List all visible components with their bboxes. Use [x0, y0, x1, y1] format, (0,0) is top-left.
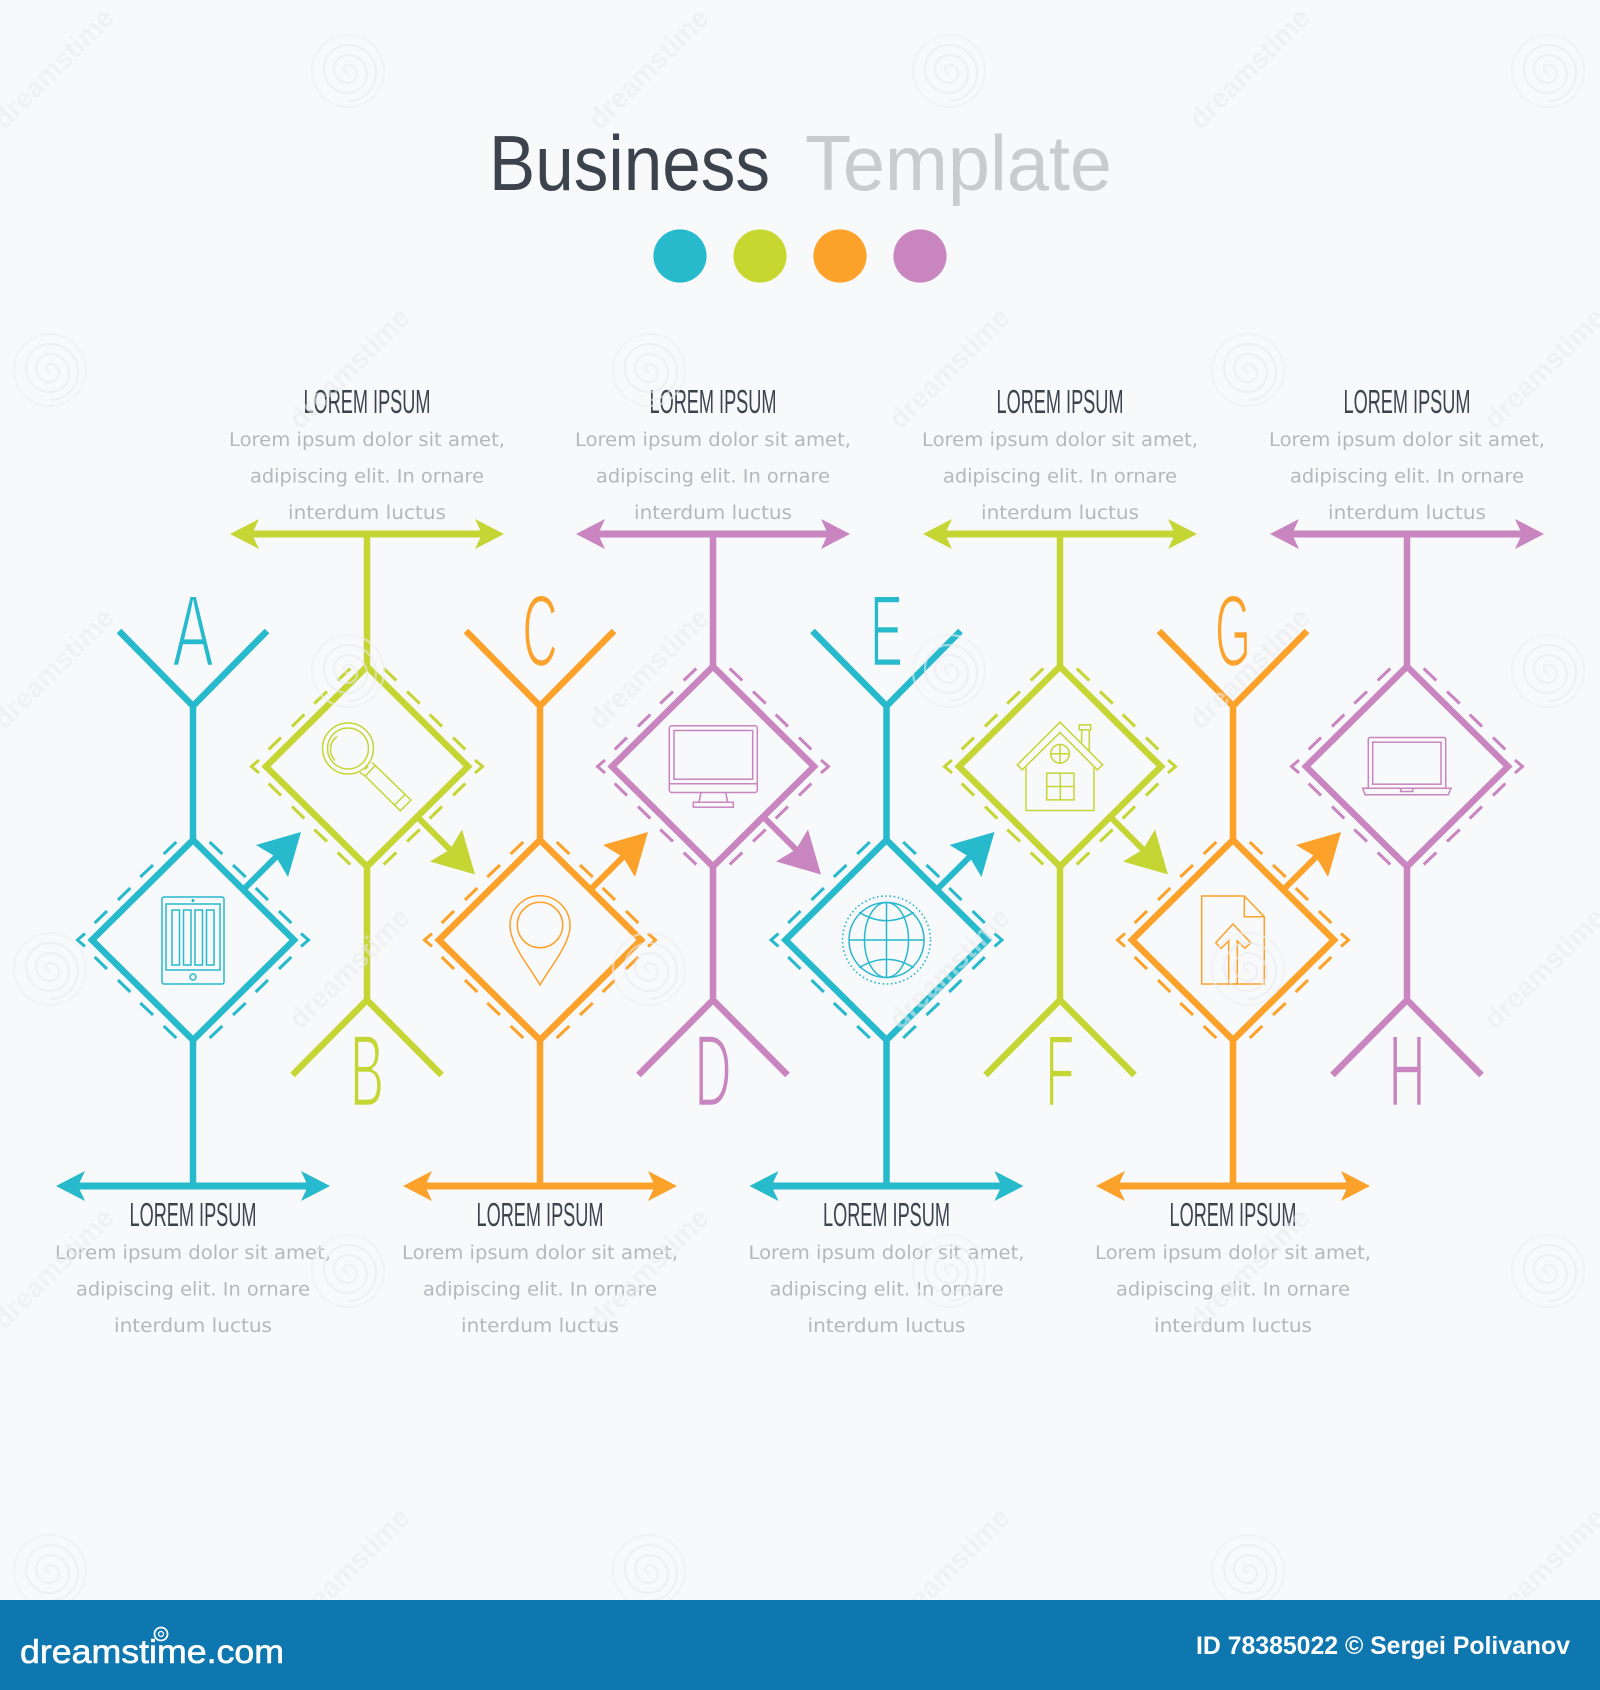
horizontal double arrow E	[750, 1171, 1024, 1201]
arrow to D	[592, 832, 648, 888]
horizontal double arrow G	[1096, 1171, 1370, 1201]
footer logo: dreamstime.com	[20, 1633, 284, 1670]
horizontal double arrow H	[1270, 519, 1544, 549]
arrow to G	[1112, 818, 1168, 874]
text F: Lorem ipsum dolor sit amet,	[922, 430, 1198, 451]
text F	[922, 430, 1198, 524]
text H: adipiscing elit. In ornare	[1290, 466, 1524, 488]
arrow to E	[765, 818, 821, 874]
letter D: D	[695, 1015, 731, 1129]
text A: adipiscing elit. In ornare	[76, 1280, 310, 1300]
text H: interdum luctus	[1328, 503, 1486, 524]
horizontal double arrow C	[403, 1171, 677, 1201]
text G: adipiscing elit. In ornare	[1116, 1280, 1350, 1300]
text E: adipiscing elit. In ornare	[770, 1280, 1004, 1300]
letter G: G	[1215, 573, 1251, 688]
diamond B	[252, 666, 482, 866]
text A: Lorem ipsum dolor sit amet,	[55, 1243, 331, 1264]
text D: interdum luctus	[634, 503, 792, 524]
step B	[229, 383, 505, 1129]
watermarks: dreamstime	[883, 1502, 1016, 1635]
diamond D	[598, 666, 828, 866]
arrow to F	[938, 832, 994, 888]
step F	[922, 383, 1198, 1128]
text H	[1269, 430, 1545, 524]
title: Business	[489, 119, 770, 207]
heading H: LOREM IPSUM	[1344, 383, 1470, 420]
icon: magnifier	[322, 723, 411, 811]
text C: adipiscing elit. In ornare	[423, 1280, 657, 1300]
watermarks: dreamstime	[582, 2, 715, 135]
arrow to C	[419, 818, 475, 874]
text B: Lorem ipsum dolor sit amet,	[229, 430, 505, 451]
arrow to H	[1285, 832, 1341, 888]
horizontal double arrow D	[576, 519, 850, 549]
watermarks: dreamstime	[883, 302, 1016, 435]
watermarks: dreamstime	[582, 602, 715, 735]
icon: monitor	[669, 726, 757, 807]
text H: Lorem ipsum dolor sit amet,	[1269, 430, 1545, 451]
text F: interdum luctus	[981, 503, 1139, 524]
text E: Lorem ipsum dolor sit amet,	[748, 1243, 1024, 1264]
text B: adipiscing elit. In ornare	[250, 466, 484, 488]
watermarks: dreamstime	[283, 1502, 416, 1635]
watermarks: dreamstime	[1183, 2, 1316, 135]
text B: interdum luctus	[288, 503, 446, 524]
letter C: C	[522, 574, 558, 688]
text C: interdum luctus	[461, 1316, 619, 1337]
text F: adipiscing elit. In ornare	[943, 466, 1177, 488]
text E: interdum luctus	[808, 1316, 966, 1337]
letter E: E	[870, 574, 903, 688]
icon: house	[1017, 722, 1103, 810]
text C: Lorem ipsum dolor sit amet,	[402, 1243, 678, 1264]
watermarks: dreamstime	[1183, 1202, 1316, 1335]
heading D: LOREM IPSUM	[650, 383, 776, 420]
footer bar	[0, 1600, 1600, 1690]
text G: interdum luctus	[1154, 1316, 1312, 1337]
heading C: LOREM IPSUM	[476, 1196, 604, 1233]
horizontal double arrow F	[923, 519, 1197, 549]
text D	[575, 430, 851, 524]
diamond H	[1292, 666, 1522, 866]
title: Template	[805, 119, 1112, 207]
horizontal double arrow A	[56, 1171, 330, 1201]
horizontal double arrow B	[230, 519, 504, 549]
heading A: LOREM IPSUM	[130, 1196, 256, 1233]
step D	[575, 383, 851, 1129]
watermarks: dreamstime	[883, 902, 1016, 1035]
text B	[229, 430, 505, 524]
text D: adipiscing elit. In ornare	[596, 466, 830, 488]
text G	[1095, 1243, 1371, 1337]
watermarks: dreamstime	[582, 1202, 715, 1335]
icon: laptop	[1363, 738, 1451, 795]
title	[489, 119, 1112, 207]
heading E: LOREM IPSUM	[823, 1196, 950, 1233]
letter H: H	[1389, 1015, 1425, 1129]
footer credit: ID 78385022 © Sergei Polivanov	[1196, 1632, 1570, 1660]
text A: interdum luctus	[114, 1316, 272, 1337]
letter B: B	[350, 1015, 384, 1129]
letter F: F	[1046, 1013, 1074, 1128]
watermarks: dreamstime	[1183, 602, 1316, 735]
step C	[402, 574, 678, 1337]
diamond F	[944, 666, 1176, 866]
diamond E	[771, 840, 1002, 1040]
arrow to B	[245, 832, 301, 888]
text E	[748, 1243, 1024, 1337]
diamond G	[1118, 840, 1348, 1040]
heading B: LOREM IPSUM	[304, 383, 430, 420]
colour dots	[653, 229, 947, 283]
icon: globe	[842, 896, 930, 984]
icon: map pin	[510, 896, 570, 985]
heading G: LOREM IPSUM	[1170, 1196, 1296, 1233]
watermarks: dreamstime	[283, 902, 416, 1035]
diamond A	[78, 840, 308, 1040]
step G	[1095, 573, 1371, 1337]
diamond C	[424, 840, 656, 1040]
icon: tablet	[162, 897, 224, 984]
text D: Lorem ipsum dolor sit amet,	[575, 430, 851, 451]
heading F: LOREM IPSUM	[996, 383, 1124, 420]
letter A: A	[173, 574, 213, 688]
step E	[748, 574, 1024, 1337]
step H	[1269, 383, 1545, 1129]
step A	[55, 574, 331, 1337]
text G: Lorem ipsum dolor sit amet,	[1095, 1243, 1371, 1264]
text C	[402, 1243, 678, 1337]
text A	[55, 1243, 331, 1337]
watermarks: dreamstime	[283, 302, 416, 435]
icon: document upload	[1202, 896, 1264, 984]
